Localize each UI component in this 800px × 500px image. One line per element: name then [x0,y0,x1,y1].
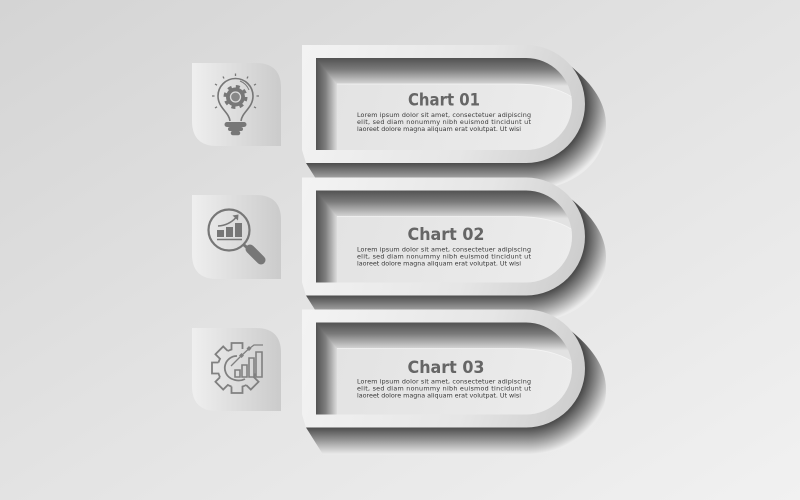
shadow of panel 2 [306,196,606,322]
shadow of panel 1 [306,64,606,190]
icon card 1: light bulb [192,63,281,146]
text block 2: elit, sed diam nonummy nibh euismod tincidunt ut [357,252,531,260]
text block 2: Lorem ipsum dolor sit amet, consectetuer adipiscing [357,246,531,254]
text block 3: laoreet dolore magna aliquam erat volutpat. Ut wisi [357,392,521,400]
text block 2: laoreet dolore magna aliquam erat volutpat. Ut wisi [357,260,521,268]
text block 3: Lorem ipsum dolor sit amet, consectetuer adipiscing [357,378,531,386]
text block 2: Chart 02 [408,225,484,244]
panel: chart 03 [302,310,606,454]
panel: chart 02 [302,178,606,322]
icon: magnifier with chart [208,210,261,260]
text block 2 [357,225,531,268]
text block 3: elit, sed diam nonummy nibh euismod tincidunt ut [357,384,531,392]
text block 1: elit, sed diam nonummy nibh euismod tincidunt ut [357,118,531,126]
text block 1: Chart 01 [408,90,480,110]
text block 1: Lorem ipsum dolor sit amet, consectetuer adipiscing [357,111,531,119]
icon: gear with bar chart [212,343,263,393]
icon card 3: gear and bars [192,328,281,411]
panel: chart 01 [302,45,606,190]
text block 1 [357,90,531,133]
icon: bulb with gear [212,74,259,133]
text block 1: laoreet dolore magna aliquam erat volutpat. Ut wisi [357,125,521,133]
text block 3 [357,358,531,400]
shadow of panel 3 [306,328,606,454]
icon card 2: magnifier [192,195,281,279]
text block 3: Chart 03 [408,358,484,377]
